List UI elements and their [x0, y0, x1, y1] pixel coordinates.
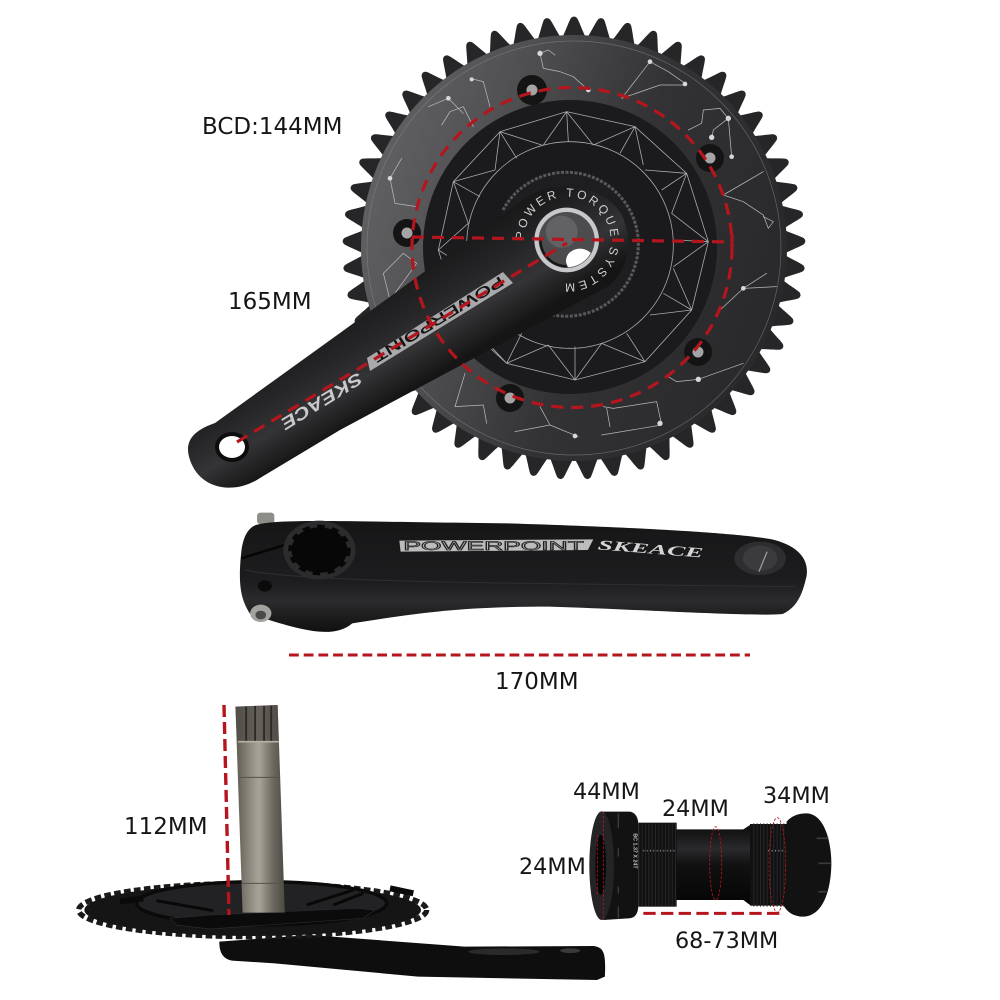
power torque system ring text: POWER TORQUE SYSTEM — [516, 188, 619, 292]
threaded sections — [638, 823, 797, 907]
skeace logo: SKEACE — [597, 538, 704, 561]
side chainring — [79, 882, 427, 937]
spindle with chainring side view — [79, 705, 605, 980]
BCD dashed circle — [412, 88, 732, 408]
crank length dashed line — [237, 243, 567, 442]
68-73MM dashed line — [643, 909, 780, 918]
side view crank arm — [240, 513, 807, 632]
chainring body — [361, 35, 787, 461]
powerpoint plate: POWERPOINT — [403, 539, 584, 553]
left cup — [589, 811, 638, 920]
pedal hole — [215, 432, 249, 462]
170MM dashed line — [289, 654, 750, 656]
left cup: BC 1.37 X 24T — [631, 833, 637, 869]
chainring teeth — [342, 16, 806, 480]
clamp bolt — [250, 580, 272, 622]
arm silhouette — [240, 521, 807, 632]
BCD dashed diameter — [412, 234, 732, 242]
powerpoint label plate: SKEACE — [277, 369, 366, 433]
label: 24MM centre: 24MM — [662, 796, 729, 822]
crank pin — [257, 513, 274, 524]
pedal thread hole — [734, 542, 786, 575]
powerpoint label plate — [277, 272, 513, 433]
bottom bracket — [589, 811, 831, 920]
label: 24MM left: 24MM — [519, 854, 586, 880]
lower crank arm — [219, 935, 605, 980]
chainring and crank assembly — [188, 16, 806, 488]
splined bore — [283, 521, 355, 579]
center sleeve — [673, 825, 750, 905]
112MM dashed line — [224, 705, 229, 915]
label: 165MM: 165MM — [228, 289, 312, 315]
label: 68-73MM: 68-73MM — [675, 928, 778, 954]
inner black disk with geometric pattern — [423, 100, 717, 394]
right cup — [783, 813, 831, 917]
bolt: chainring fasteners — [393, 75, 724, 412]
hub with spindle opening — [516, 188, 619, 292]
spindle — [235, 705, 285, 913]
constellation engravings — [383, 50, 777, 438]
label: 112MM: 112MM — [124, 814, 208, 840]
red measurement ellipses — [597, 812, 786, 920]
label: 170MM: 170MM — [495, 669, 579, 695]
powerpoint label plate: POWERPOINT — [370, 273, 507, 366]
label: 34MM: 34MM — [763, 783, 830, 809]
powerpoint plate — [399, 539, 593, 553]
crank arm — [188, 186, 628, 488]
label: BCD: BCD:144MM — [202, 114, 342, 140]
label: 44MM: 44MM — [573, 779, 640, 805]
